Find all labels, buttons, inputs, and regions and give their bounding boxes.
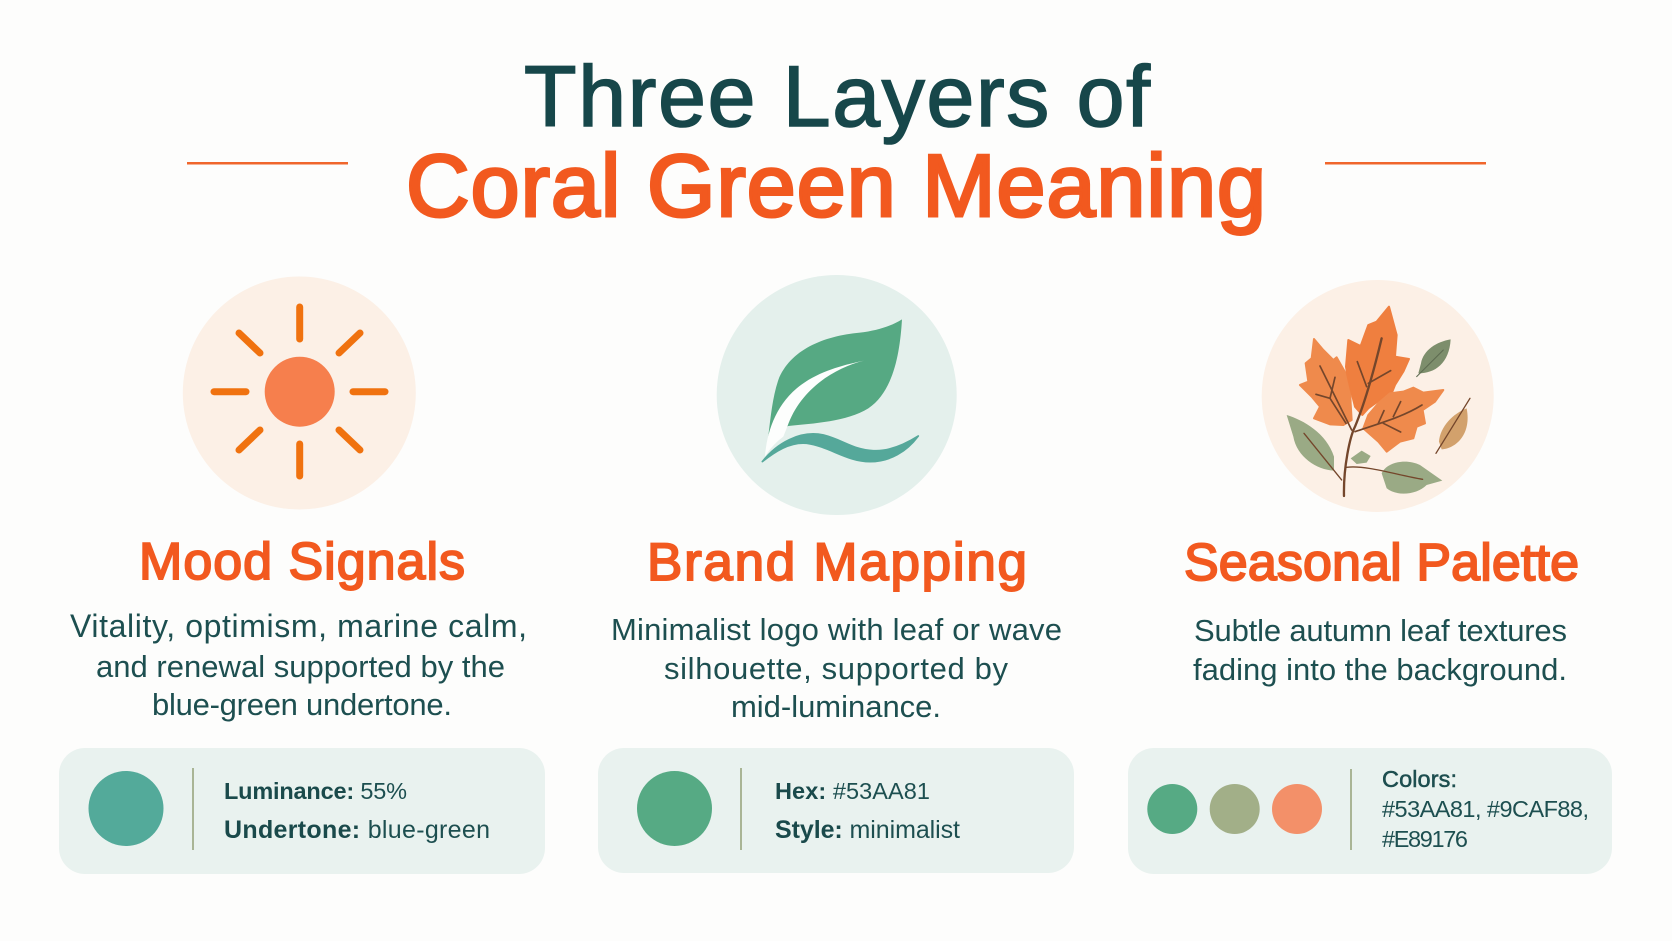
- panel: seasonal palette: [1128, 280, 1612, 874]
- text: brand description: silhouette, supported by: [664, 651, 1008, 686]
- heading: seasonal palette: Seasonal Palette: [1184, 534, 1579, 592]
- text: mood description: [70, 608, 527, 722]
- title: Coral Green Meaning: [406, 136, 1266, 235]
- card: luminance: Luminance: 55%: [224, 778, 407, 804]
- panel: brand mapping: [598, 275, 1074, 873]
- card: luminance: Undertone: blue-green: [224, 816, 490, 844]
- card: colors: [1128, 748, 1612, 874]
- title: [406, 49, 1266, 235]
- icon: sun: [183, 276, 416, 510]
- text: brand description: Minimalist logo with leaf or wave: [611, 612, 1062, 647]
- icon: leaf and wave: [717, 275, 957, 515]
- text: seasonal description: [1193, 613, 1567, 687]
- card: colors: Colors:: [1382, 766, 1457, 792]
- text: seasonal description: fading into the background.: [1193, 652, 1567, 687]
- card: hex: [598, 748, 1074, 873]
- text: seasonal description: Subtle autumn leaf textures: [1194, 613, 1567, 648]
- text: mood description: blue-green undertone.: [152, 687, 452, 722]
- text: brand description: mid-luminance.: [731, 689, 941, 724]
- card: hex: Style: minimalist: [775, 816, 960, 844]
- card: luminance: [59, 748, 545, 874]
- panel: mood signals: [59, 276, 545, 874]
- card: colors: #53AA81, #9CAF88,: [1382, 796, 1589, 822]
- card: colors: #E89176: [1382, 826, 1468, 852]
- title: Three Layers of: [524, 49, 1151, 145]
- icon: autumn leaves: [1262, 280, 1494, 512]
- text: mood description: Vitality, optimism, marine calm,: [70, 608, 527, 644]
- text: brand description: [611, 612, 1062, 724]
- heading: mood signals: Mood Signals: [139, 533, 465, 591]
- card: hex: Hex: #53AA81: [775, 778, 930, 804]
- text: mood description: and renewal supported by the: [96, 649, 505, 684]
- heading: brand mapping: Brand Mapping: [647, 533, 1027, 592]
